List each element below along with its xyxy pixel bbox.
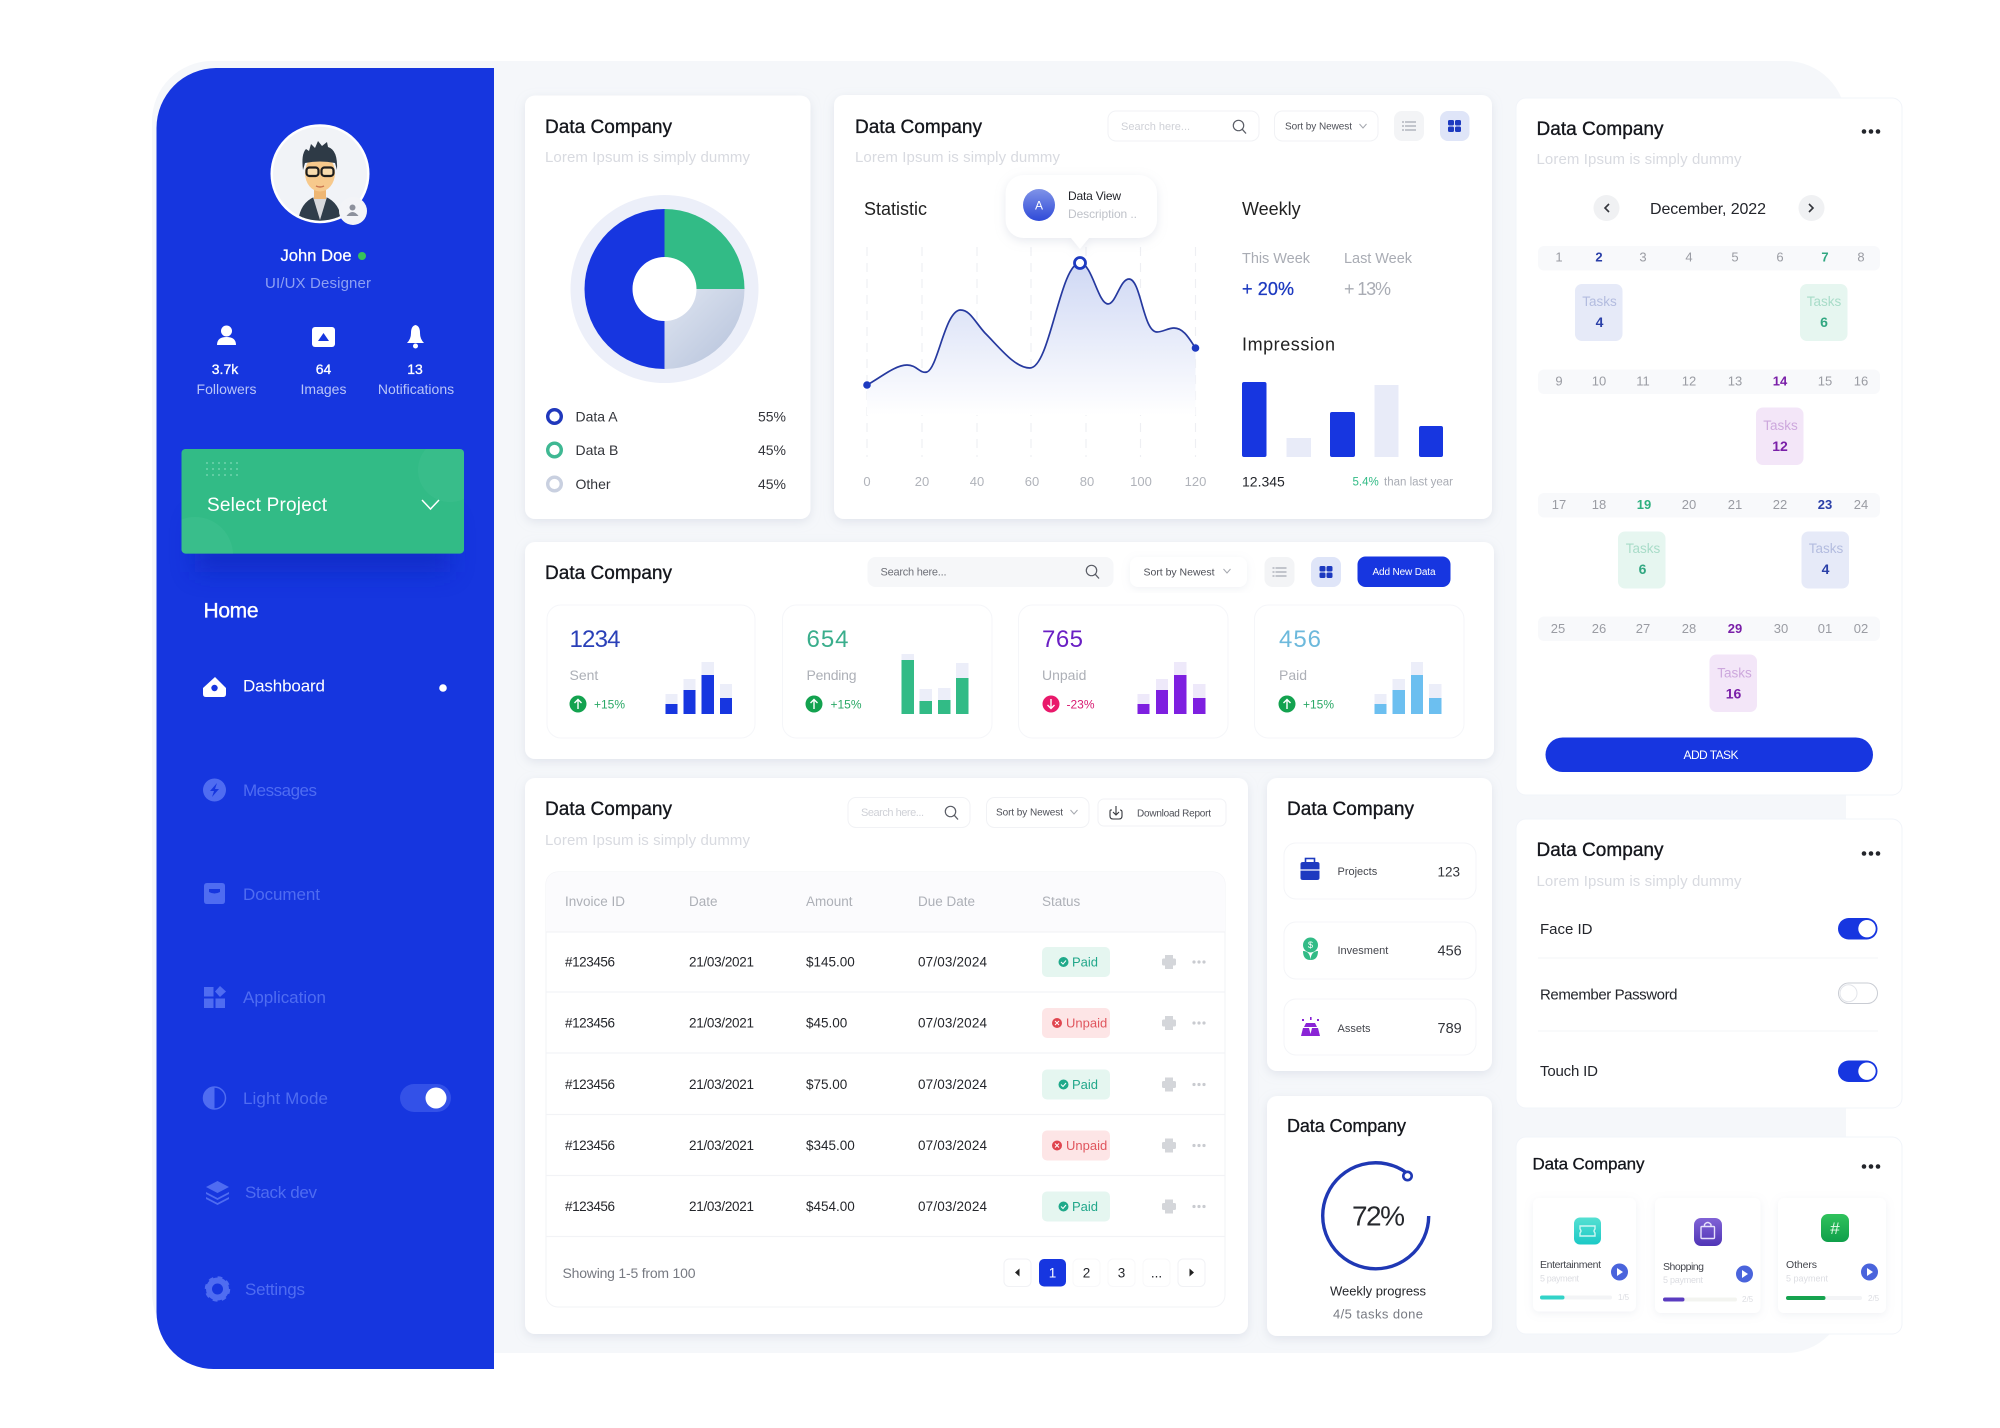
week 3: 21 (1728, 497, 1742, 512)
row 2: 21/03/2021 (689, 1016, 754, 1030)
stat card: unpaid (1018, 605, 1228, 738)
add task button (1546, 738, 1873, 772)
area chart: 0 (863, 474, 871, 489)
sidebar (156, 68, 494, 1369)
download report button: Download Report (1137, 808, 1211, 820)
stat card: sent (547, 605, 755, 738)
row 4 (565, 1130, 1206, 1160)
search box: Search here... (861, 807, 924, 819)
item: investment (1284, 922, 1476, 979)
week 1 (1538, 246, 1880, 270)
progress ring: 72% (1352, 1200, 1405, 1232)
user name: John Doe (280, 247, 352, 265)
item: investment: $ (1308, 940, 1313, 950)
legend (548, 408, 786, 492)
user avatar (270, 124, 370, 225)
menu: messages: Messages (243, 781, 317, 800)
stat: notifications: Notifications (378, 381, 454, 397)
task: day 29 (1710, 654, 1757, 712)
week 3 (1538, 493, 1880, 518)
subtitle: Lorem Ipsum is simply dummy (545, 149, 750, 166)
category: others: # (1830, 1219, 1840, 1238)
weekly stats: + 20% (1242, 279, 1294, 299)
panel: security settings card (1516, 819, 1902, 1108)
task: day 23: Tasks (1809, 541, 1844, 556)
week 2: 11 (1636, 374, 1650, 388)
tooltip: A (1035, 198, 1043, 212)
heading: Data Company (855, 117, 982, 138)
row 5: 07/03/2024 (918, 1199, 987, 1214)
menu: document (204, 883, 320, 904)
stat card: paid (1254, 605, 1464, 738)
week 3: 18 (1592, 497, 1606, 512)
panel: totals card (1267, 778, 1492, 1071)
progress detail: 4/5 tasks done (1333, 1306, 1423, 1322)
tooltip: Description .. (1068, 207, 1137, 221)
menu: light mode: Light Mode (243, 1089, 328, 1108)
week 1: 7 (1821, 250, 1829, 264)
subtitle: Lorem Ipsum is simply dummy (1536, 151, 1742, 168)
panel: donut card (525, 96, 810, 519)
menu: stack dev: Stack dev (245, 1183, 318, 1202)
stat: images (301, 327, 346, 397)
menu dots (1862, 851, 1880, 856)
week 2: 13 (1728, 374, 1742, 388)
sort dropdown: Sort by Newest (1285, 122, 1352, 132)
area chart: 40 (970, 474, 984, 489)
legend: 45% (758, 442, 786, 458)
menu: dashboard: Dashboard (243, 676, 325, 696)
list view button (1394, 111, 1424, 141)
week 1: 3 (1639, 250, 1647, 264)
heading: Data Company (545, 799, 672, 820)
pagination (1004, 1259, 1205, 1286)
category: shopping: 5 payment (1663, 1275, 1703, 1285)
table header: Invoice ID (565, 894, 625, 909)
category: entertainment: Entertainment (1540, 1259, 1601, 1271)
stat: followers: 3.7k (212, 361, 239, 377)
heading: Data Company (1536, 840, 1664, 861)
task: day 7 (1800, 284, 1848, 341)
sort dropdown (1130, 557, 1247, 587)
week 3: 23 (1818, 497, 1832, 512)
search box (868, 557, 1114, 587)
row 5: 21/03/2021 (689, 1199, 754, 1214)
table header: Due Date (918, 894, 975, 909)
week 1: 2 (1595, 250, 1603, 264)
row 5: $454.00 (806, 1199, 855, 1214)
stat card: pending: +15% (830, 698, 862, 712)
item: investment: 456 (1438, 944, 1462, 960)
week 2 (1538, 370, 1880, 394)
week 4: 02 (1854, 621, 1868, 636)
menu: application (204, 986, 326, 1008)
subtitle: Lorem Ipsum is simply dummy (855, 149, 1060, 166)
week 4: 26 (1592, 621, 1606, 636)
setting: touch id: Touch ID (1540, 1063, 1598, 1080)
category: entertainment (1533, 1198, 1636, 1312)
add new data button (1358, 556, 1450, 587)
item: projects (1284, 843, 1476, 899)
weekly stats: Weekly (1242, 199, 1301, 219)
impression bar chart: 12.345 (1242, 474, 1285, 490)
stat: images: 64 (316, 361, 331, 377)
stat: followers (197, 326, 256, 397)
menu: document: Document (243, 885, 320, 904)
task: day 29: 16 (1726, 686, 1741, 702)
week 2: 15 (1818, 374, 1832, 388)
legend: Data A (576, 408, 618, 424)
stat card: sent: Sent (570, 667, 598, 683)
menu dots (1862, 129, 1880, 134)
search box (848, 798, 970, 828)
row 3: Paid (1072, 1077, 1098, 1092)
heading: Data Company (1287, 1116, 1406, 1136)
task: day 23 (1802, 532, 1849, 588)
row 5 (565, 1192, 1206, 1222)
item: assets: Assets (1338, 1023, 1371, 1035)
stat: notifications: 13 (407, 361, 423, 377)
progress ring (1323, 1163, 1429, 1269)
menu: messages (203, 778, 317, 802)
week 4: 25 (1551, 621, 1565, 636)
invoice table (546, 872, 1225, 1307)
task: day 2: 4 (1596, 314, 1604, 330)
panel: invoice table card (525, 778, 1248, 1334)
pagination: 3 (1118, 1266, 1125, 1280)
week 3: 22 (1773, 497, 1787, 512)
row 4: Unpaid (1066, 1138, 1107, 1153)
status dot (358, 252, 366, 260)
row 2: #123456 (565, 1016, 615, 1030)
week 3: 19 (1637, 497, 1651, 512)
menu: application: Application (243, 988, 326, 1007)
row 4: 07/03/2024 (918, 1138, 987, 1153)
sort dropdown (986, 798, 1089, 828)
legend: Other (576, 476, 611, 492)
legend: Data B (576, 442, 618, 458)
heading: Data Company (1287, 799, 1414, 820)
table header: Date (689, 894, 718, 909)
week 3: 20 (1682, 497, 1696, 512)
stat card: paid: +15% (1303, 698, 1334, 712)
stat card: paid: 456 (1279, 626, 1321, 653)
row 1 (565, 947, 1206, 977)
task: day 2: Tasks (1582, 294, 1617, 309)
table header (565, 894, 1081, 909)
heading: Data Company (1532, 1154, 1645, 1174)
grid view button (1440, 111, 1470, 141)
stat card: pending (782, 605, 992, 738)
row 5: #123456 (565, 1199, 615, 1214)
heading: Data Company (1536, 119, 1664, 140)
task: day 7: 6 (1820, 314, 1828, 330)
subtitle: Lorem Ipsum is simply dummy (545, 832, 750, 849)
stat: images: Images (301, 381, 346, 397)
task: day 2 (1575, 284, 1622, 341)
week 4: 01 (1818, 621, 1832, 636)
category: shopping: Shopping (1663, 1261, 1704, 1273)
select project shadow (195, 520, 450, 572)
heading: Data Company (545, 117, 672, 138)
table header: Amount (806, 894, 853, 909)
panel: weekly progress card (1267, 1096, 1492, 1336)
stat: followers: Followers (197, 381, 256, 397)
heading: Data Company (545, 563, 672, 584)
weekly stats: This Week (1242, 251, 1311, 267)
tooltip: Data View (1068, 189, 1121, 203)
menu: stack dev (206, 1181, 318, 1205)
row 1: $145.00 (806, 954, 855, 970)
category: shopping (1655, 1198, 1760, 1313)
grid view button (1311, 557, 1341, 587)
stat card: sent: +15% (594, 698, 625, 712)
sort dropdown: Sort by Newest (1144, 566, 1215, 578)
row 3 (565, 1070, 1206, 1100)
week 4: 30 (1774, 621, 1788, 636)
week 4 (1538, 616, 1880, 641)
item: assets: 789 (1438, 1021, 1462, 1037)
background panel (152, 61, 1846, 1353)
row 4: $345.00 (806, 1138, 855, 1153)
week 1: 8 (1857, 250, 1865, 264)
select project button (182, 449, 464, 554)
weekly stats (1242, 199, 1413, 299)
week 1: 1 (1555, 250, 1563, 264)
item: projects: Projects (1338, 866, 1378, 878)
area chart: 120 (1185, 474, 1206, 489)
impression bar chart: Impression (1242, 334, 1335, 354)
week 2: 12 (1682, 374, 1696, 388)
stat card: pending: 654 (806, 626, 848, 653)
donut chart (570, 195, 758, 383)
sort dropdown (1274, 111, 1378, 141)
task: day 14 (1756, 408, 1804, 465)
category: shopping: 2/5 (1742, 1295, 1754, 1304)
panel: categories card (1516, 1137, 1902, 1334)
impression bar chart: than last year (1384, 476, 1453, 488)
row 1: Paid (1072, 954, 1098, 970)
add task button: ADD TASK (1684, 748, 1738, 762)
user role: UI/UX Designer (265, 275, 371, 292)
row 4: 21/03/2021 (689, 1138, 754, 1153)
pagination: ... (1151, 1266, 1162, 1280)
row 2 (565, 1008, 1206, 1038)
row 1: #123456 (565, 954, 615, 970)
table header: Status (1042, 894, 1081, 909)
category: others: Others (1786, 1259, 1817, 1271)
month navigation (1594, 195, 1824, 221)
week 4: 29 (1728, 621, 1742, 636)
add new data button: Add New Data (1372, 567, 1436, 578)
stat card: unpaid: -23% (1066, 698, 1095, 712)
impression bar chart: 5.4% (1352, 476, 1379, 488)
pagination: 1 (1049, 1266, 1056, 1280)
search box (1108, 111, 1259, 141)
select project button: Select Project (207, 495, 328, 516)
row 3: #123456 (565, 1077, 615, 1092)
week 3: 17 (1552, 497, 1566, 512)
menu: settings: Settings (245, 1280, 305, 1299)
weekly stats: + 13% (1344, 279, 1391, 299)
stat card: unpaid: Unpaid (1042, 667, 1086, 683)
menu dots (1862, 1164, 1880, 1169)
setting: remember password: Remember Password (1540, 986, 1678, 1004)
area chart: 80 (1080, 474, 1094, 489)
sort dropdown: Sort by Newest (996, 808, 1063, 818)
area chart: 20 (915, 474, 929, 489)
row 4: #123456 (565, 1138, 615, 1153)
legend: 45% (758, 476, 786, 492)
menu heading: Home (204, 600, 258, 622)
subtitle: Lorem Ipsum is simply dummy (1536, 873, 1742, 890)
stat card: pending: Pending (806, 667, 856, 683)
setting: face id (1540, 918, 1878, 940)
row 2: Unpaid (1066, 1016, 1107, 1030)
task: day 23: 4 (1822, 561, 1830, 577)
category: entertainment: 5 payment (1540, 1274, 1579, 1284)
weekly stats: Last Week (1344, 251, 1413, 267)
download report button (1098, 799, 1226, 826)
pagination: 2 (1083, 1266, 1090, 1280)
progress caption: Weekly progress (1330, 1284, 1426, 1298)
search box: Search here... (880, 566, 946, 578)
row 3: 07/03/2024 (918, 1077, 987, 1092)
row 5: Paid (1072, 1199, 1098, 1214)
row 2: 07/03/2024 (918, 1016, 987, 1030)
week 1: 6 (1776, 250, 1784, 264)
area chart: 100 (1130, 474, 1152, 489)
area chart: 60 (1025, 474, 1039, 489)
task: day 19: Tasks (1626, 541, 1661, 556)
impression bar chart (1242, 334, 1453, 490)
panel: summary card (525, 542, 1494, 759)
week 1: 4 (1685, 250, 1693, 264)
statistic label: Statistic (864, 199, 927, 219)
row 1: 07/03/2024 (918, 954, 987, 970)
item: assets (1284, 999, 1476, 1055)
menu: dashboard (203, 676, 447, 697)
row 3: 21/03/2021 (689, 1077, 754, 1092)
task: day 19 (1618, 532, 1666, 588)
task: day 14: Tasks (1763, 418, 1798, 433)
category: entertainment: 1/5 (1618, 1293, 1630, 1302)
week 2: 10 (1592, 374, 1606, 388)
setting: face id: Face ID (1540, 921, 1593, 938)
search box: Search here... (1121, 121, 1190, 133)
row 3: $75.00 (806, 1077, 847, 1092)
week 1: 5 (1731, 250, 1739, 264)
stat card: paid: Paid (1279, 667, 1307, 683)
list view button (1264, 557, 1294, 587)
category: others: 5 payment (1786, 1274, 1828, 1284)
item: investment: Invesment (1338, 945, 1388, 957)
task: day 29: Tasks (1717, 666, 1752, 680)
pagination info: Showing 1-5 from 100 (562, 1265, 696, 1281)
week 3: 24 (1854, 497, 1868, 512)
legend: 55% (758, 408, 786, 424)
item: projects: 123 (1438, 864, 1460, 880)
row 1: 21/03/2021 (689, 954, 754, 970)
tooltip (1006, 175, 1157, 249)
task: day 19: 6 (1639, 561, 1647, 577)
category: others (1778, 1198, 1886, 1313)
panel: statistic card (834, 95, 1492, 519)
task: day 14: 12 (1772, 438, 1788, 454)
stat card: unpaid: 765 (1042, 626, 1083, 653)
setting: remember password (1540, 983, 1878, 1004)
week 2: 14 (1773, 374, 1788, 388)
menu: settings (206, 1278, 305, 1300)
menu: light mode (204, 1084, 451, 1112)
category: others: 2/5 (1868, 1294, 1880, 1303)
row 2: $45.00 (806, 1016, 847, 1030)
setting: touch id (1540, 1060, 1878, 1082)
area chart (863, 247, 1206, 489)
week 4: 28 (1682, 621, 1696, 636)
month navigation: December, 2022 (1650, 201, 1766, 218)
stat card: sent: 1234 (570, 626, 620, 653)
week 4: 27 (1636, 621, 1650, 636)
week 2: 9 (1555, 374, 1563, 388)
panel: calendar card (1516, 98, 1902, 795)
stat: notifications (378, 325, 454, 397)
task: day 7: Tasks (1807, 294, 1842, 309)
week 2: 16 (1854, 374, 1868, 388)
